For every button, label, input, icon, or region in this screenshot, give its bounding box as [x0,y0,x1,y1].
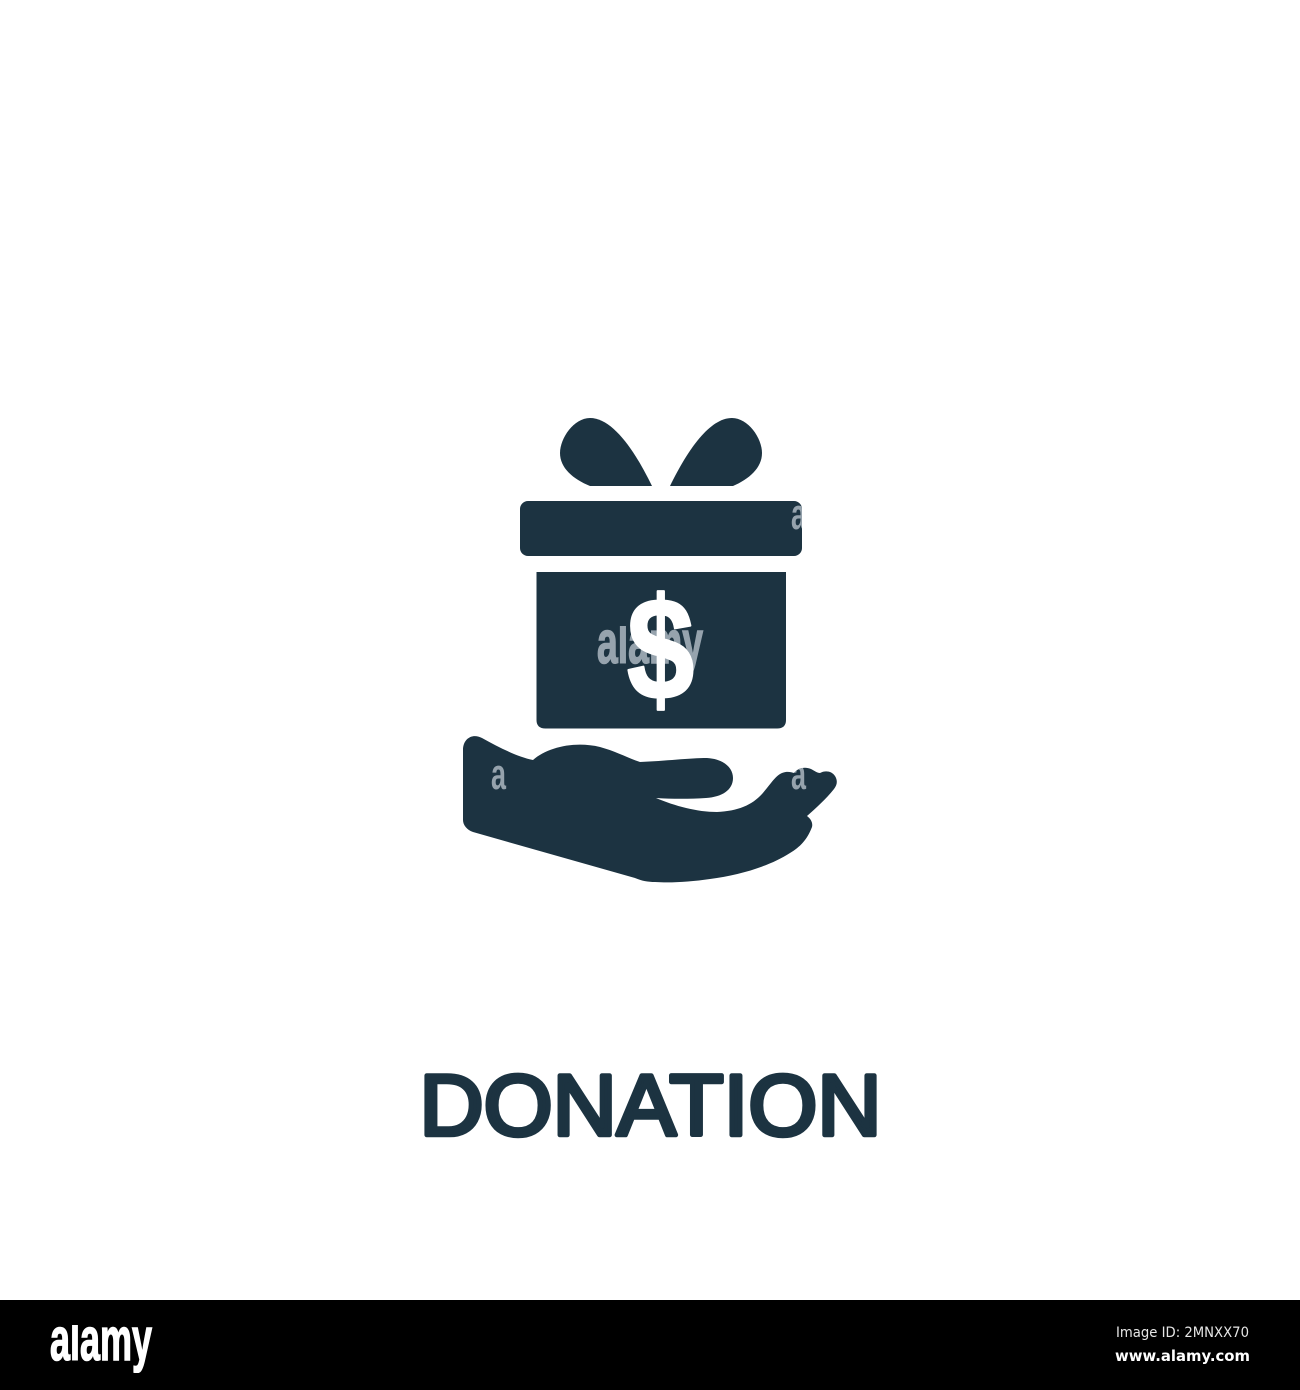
watermark: hand left letter: a [491,750,506,799]
icon: gift box on hand [463,418,837,882]
footer band [0,1300,1300,1390]
watermark: centre alamy: alamy [597,609,703,676]
icon: open hand [463,736,837,882]
icon: right ribbon bow [670,418,762,486]
icon: gift box body [536,572,786,728]
image id: Image ID: 2MNXX70 [1116,1325,1249,1341]
footer logo: alamy [50,1306,152,1373]
website: www.alamy.com [1115,1347,1250,1365]
icon: gift lid [520,501,802,556]
title: DONATION [420,1058,882,1154]
icon: left ribbon bow [560,418,652,486]
watermark: hand right letter: a [791,750,806,799]
icon: dollar sign: $ [627,569,694,730]
watermark: lid letter: a [791,490,806,539]
